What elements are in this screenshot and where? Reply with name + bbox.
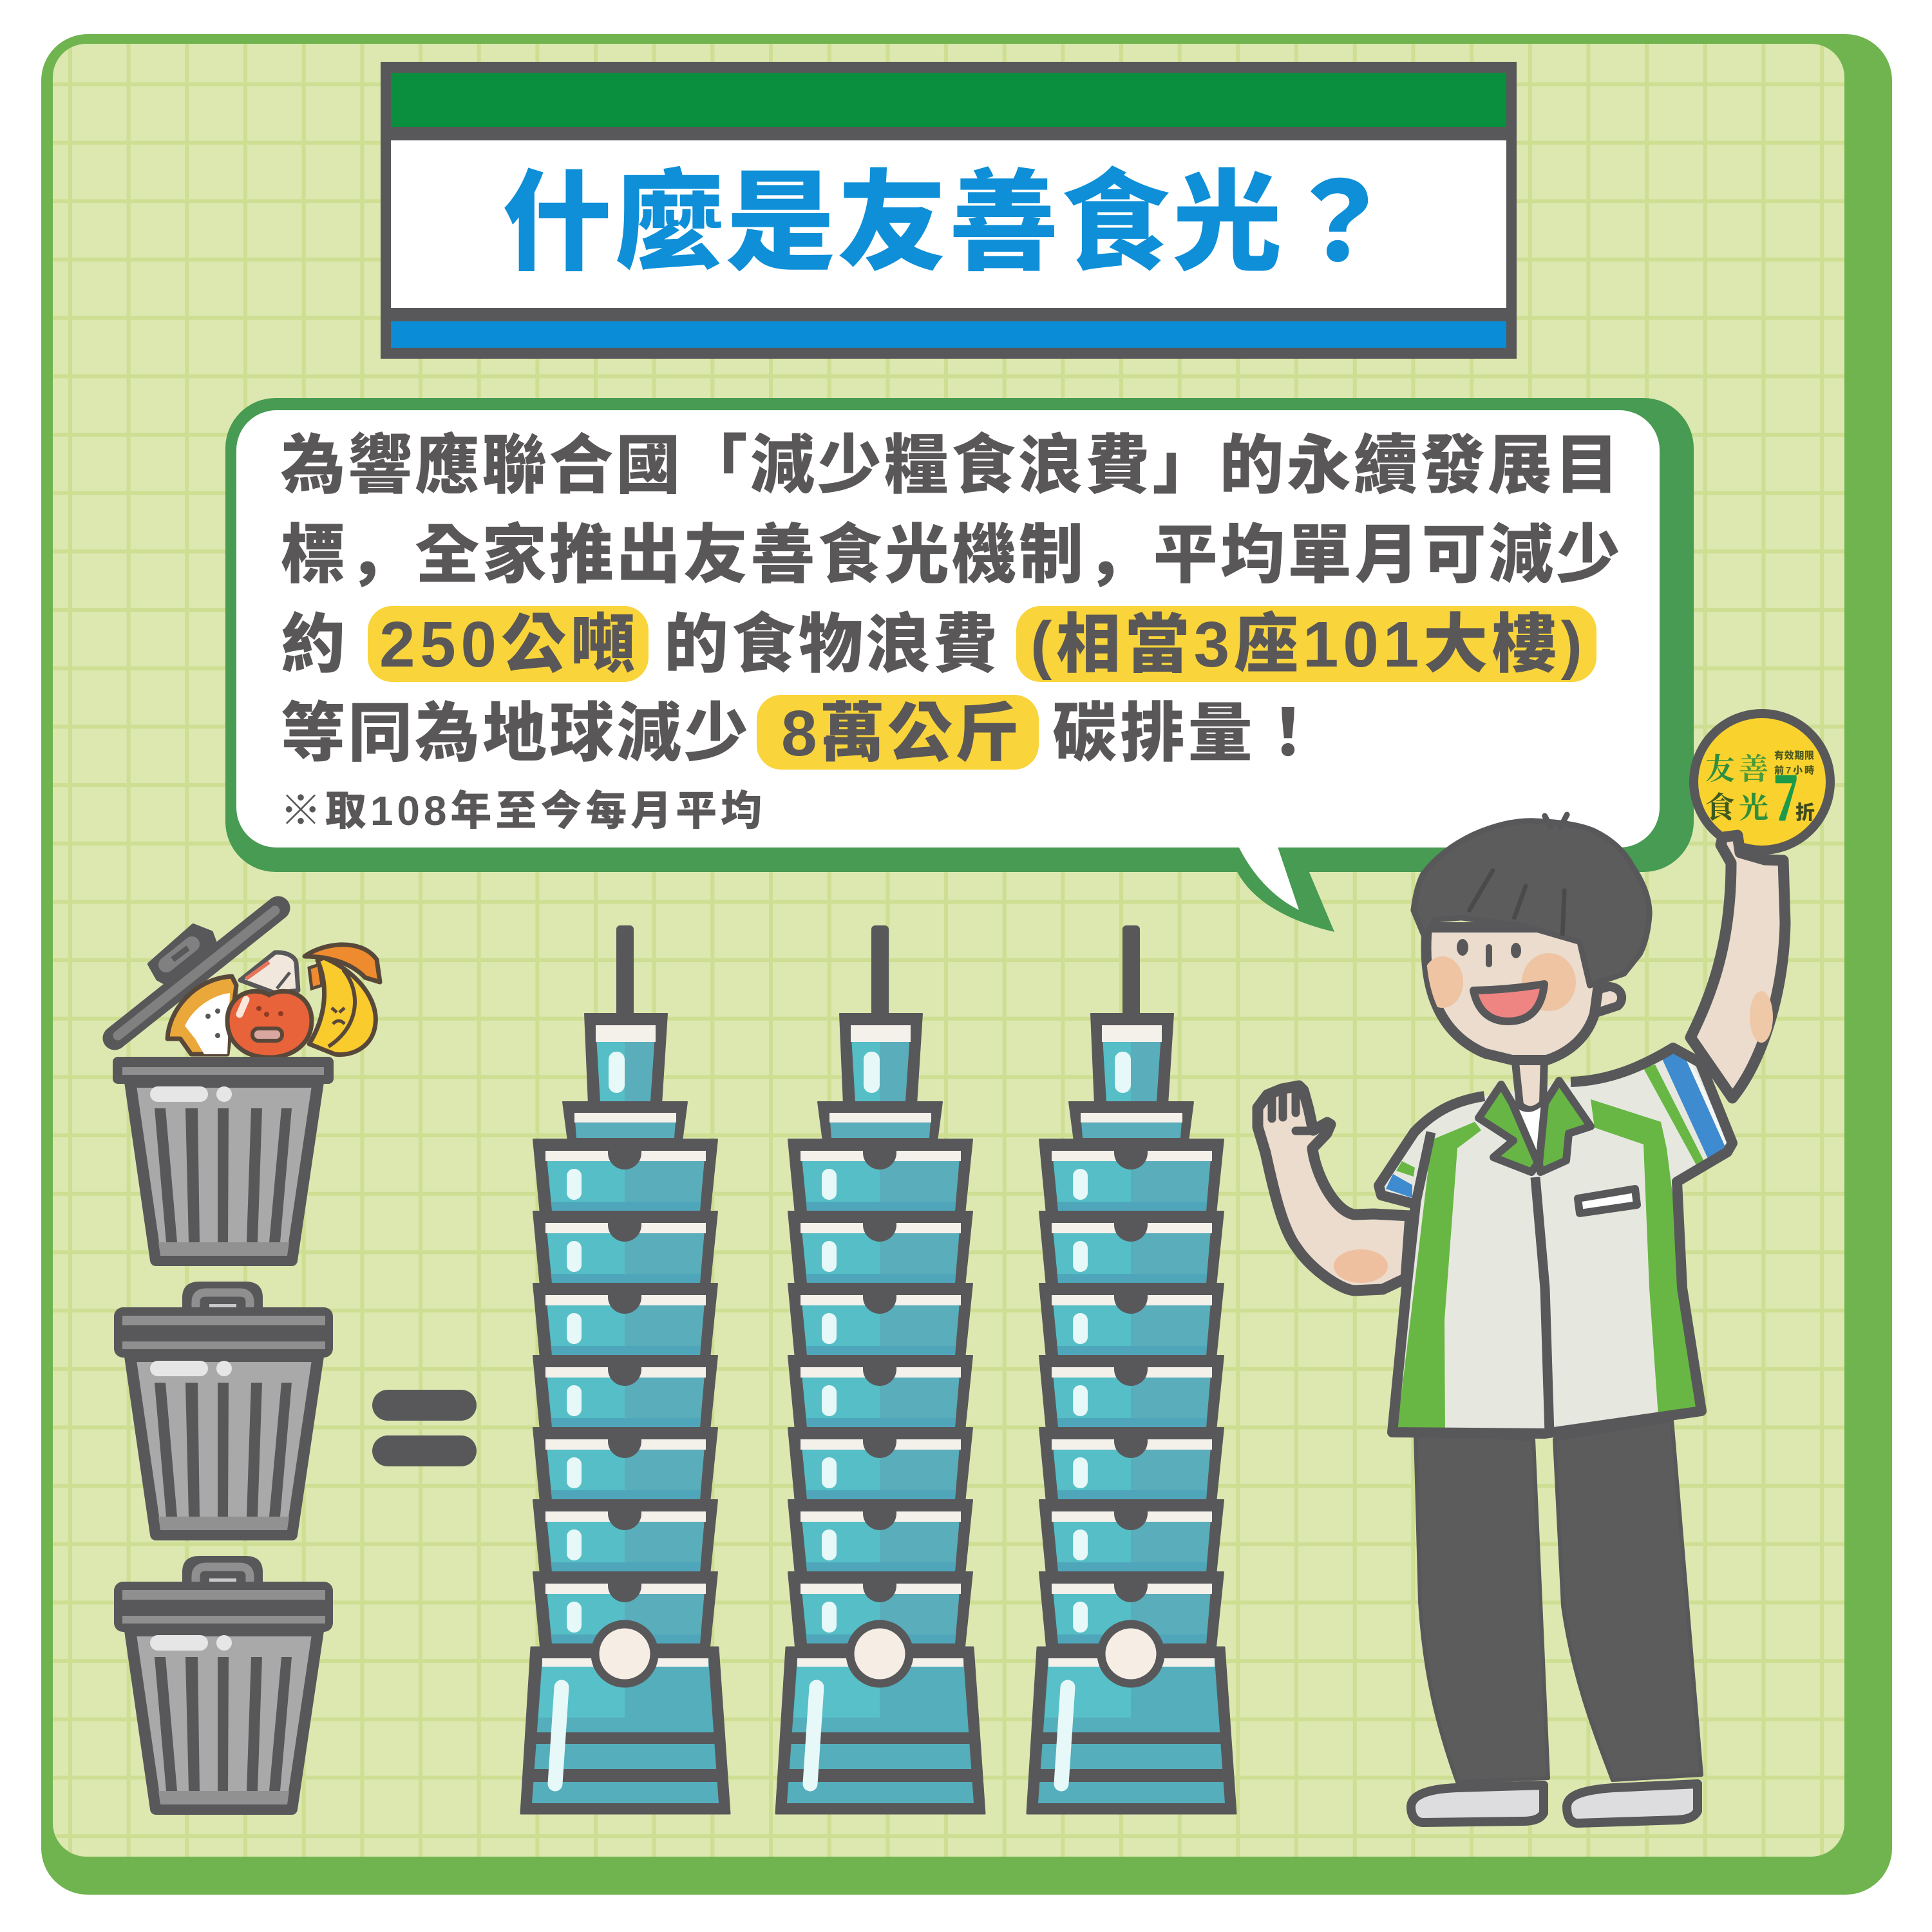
clerk character — [1258, 714, 1830, 1823]
food: apple — [227, 991, 312, 1057]
badge: friendly food discount: 食 — [1705, 784, 1735, 827]
badge: friendly food discount — [1694, 714, 1830, 850]
body text line 4: 8萬公斤 — [781, 697, 1019, 770]
body text line 1: 為響應聯合國「減少糧食浪費」的永續發展目 — [281, 430, 1619, 502]
bubble tail — [1236, 871, 1334, 932]
right sleeve stripes — [1643, 1048, 1730, 1165]
eyes and nose — [1457, 939, 1521, 967]
left green panel — [1397, 1122, 1481, 1431]
Taipei 101 tower 3 — [1027, 925, 1236, 1814]
badge: friendly food discount: 7 — [1774, 752, 1799, 837]
title banner — [381, 62, 1517, 359]
cheeks — [1422, 953, 1576, 1011]
body text line 2: 標，全家推出友善食光機制，平均單月可減少 — [281, 502, 1620, 596]
body text line 4 — [281, 695, 1320, 770]
trash can with food — [115, 908, 380, 1260]
equals sign — [372, 1390, 477, 1466]
lid of can 2 — [114, 1282, 333, 1358]
food: banana — [309, 958, 375, 1055]
lid of can 3 — [114, 1556, 333, 1632]
title bottom blue band — [391, 321, 1506, 348]
hair — [1414, 815, 1649, 985]
head — [1414, 815, 1649, 1060]
trash can 3 — [114, 1556, 333, 1809]
body text line 3: 約 — [281, 609, 345, 681]
right shoe — [1567, 1784, 1698, 1823]
trash can 2 — [114, 1282, 333, 1535]
badge: friendly food discount: 折 — [1795, 802, 1815, 824]
body text line 3: (相當3座101大樓) — [1030, 609, 1582, 681]
body text line 3 — [281, 606, 1596, 682]
title text: 什麼是友善食光？ — [502, 162, 1394, 285]
undershirt — [1518, 1103, 1545, 1159]
speech bubble — [225, 398, 1694, 932]
Taipei 101 tower 2 — [776, 925, 985, 1814]
mouth — [1473, 984, 1544, 1021]
food: bread — [167, 976, 236, 1054]
neck — [1515, 1056, 1544, 1110]
badge: friendly food discount: 有效期限 — [1774, 750, 1814, 761]
body text line 4: 等同為地球減少 — [281, 697, 748, 770]
badge: friendly food discount: 前7小時 — [1774, 764, 1814, 776]
badge: friendly food discount: 光 — [1739, 784, 1768, 827]
trousers — [1416, 1420, 1701, 1782]
right green panel — [1591, 1099, 1697, 1416]
title top green band — [391, 73, 1506, 127]
uniform shirt — [1379, 1048, 1732, 1434]
Taipei 101 tower 1 — [521, 925, 730, 1814]
rim and body of can 1 — [115, 1059, 332, 1260]
badge: friendly food discount: 善 — [1739, 746, 1768, 788]
shirt inner seams — [1416, 1132, 1549, 1434]
name tag — [1578, 1189, 1637, 1213]
left sleeve stripes — [1386, 1161, 1415, 1198]
footnote: ※取108年至今每月平均 — [280, 788, 762, 834]
food: fish bone — [240, 952, 298, 993]
shirt outline — [1379, 1048, 1732, 1434]
body text line 3: 250公噸 — [379, 609, 635, 681]
collar — [1479, 1081, 1591, 1172]
body text line 4: 碳排量！ — [1052, 697, 1320, 770]
raised right arm — [1690, 835, 1785, 1098]
open lid — [115, 908, 278, 1038]
food: orange peel — [305, 945, 380, 989]
ear — [1591, 987, 1622, 1013]
left shoe — [1411, 1785, 1544, 1823]
title white panel — [391, 140, 1506, 308]
badge: friendly food discount: 友 — [1705, 746, 1735, 788]
waving left arm — [1258, 1086, 1410, 1291]
face — [1426, 927, 1601, 1060]
body text line 3: 的食物浪費 — [664, 609, 998, 681]
